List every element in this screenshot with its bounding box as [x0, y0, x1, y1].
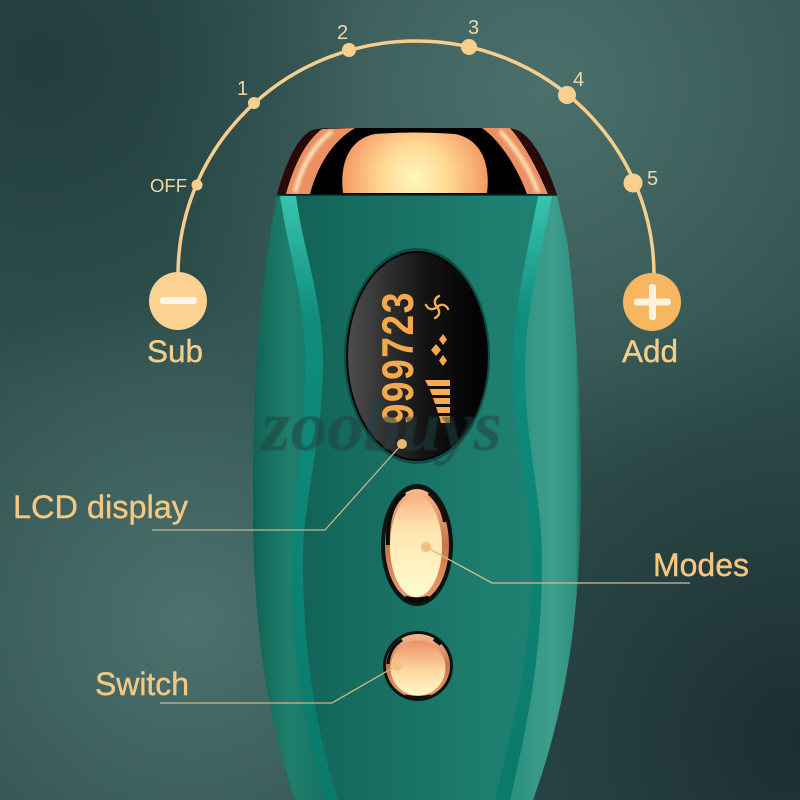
callout: LCD display	[13, 439, 407, 530]
chrome band left	[286, 128, 355, 194]
level labels: 2	[337, 22, 348, 44]
treatment window glow	[342, 132, 488, 193]
level labels: 3	[468, 17, 479, 39]
callout: LCD display: LCD display	[13, 489, 189, 525]
callout: modes	[421, 542, 749, 583]
add label: Add	[622, 333, 678, 369]
switch button	[383, 631, 453, 701]
modes button	[381, 484, 453, 606]
level labels: 5	[647, 168, 658, 190]
LCD display screen	[344, 248, 490, 464]
power level arc	[150, 17, 658, 275]
add button	[622, 273, 681, 369]
watermark: zoobuys	[259, 386, 502, 466]
sub label: Sub	[147, 333, 203, 369]
level labels	[150, 17, 658, 196]
right accent band	[495, 196, 552, 800]
level labels: 1	[237, 78, 248, 100]
icon: diamonds	[431, 334, 447, 366]
icon: fan	[426, 296, 448, 318]
callout: switch: Switch	[95, 666, 189, 702]
LCD digits: 999723	[375, 292, 427, 425]
level dots	[192, 39, 642, 192]
right side panel	[510, 196, 581, 800]
chrome band right	[482, 128, 548, 194]
icon: level bars	[425, 380, 450, 423]
device body	[253, 195, 581, 800]
level labels: 4	[573, 69, 584, 91]
callout: switch	[95, 661, 402, 703]
callout: modes: Modes	[653, 547, 749, 583]
level labels: OFF	[150, 175, 187, 196]
sub button	[147, 272, 207, 369]
left accent band	[280, 196, 338, 800]
left side panel	[253, 196, 325, 800]
device head	[277, 128, 557, 195]
